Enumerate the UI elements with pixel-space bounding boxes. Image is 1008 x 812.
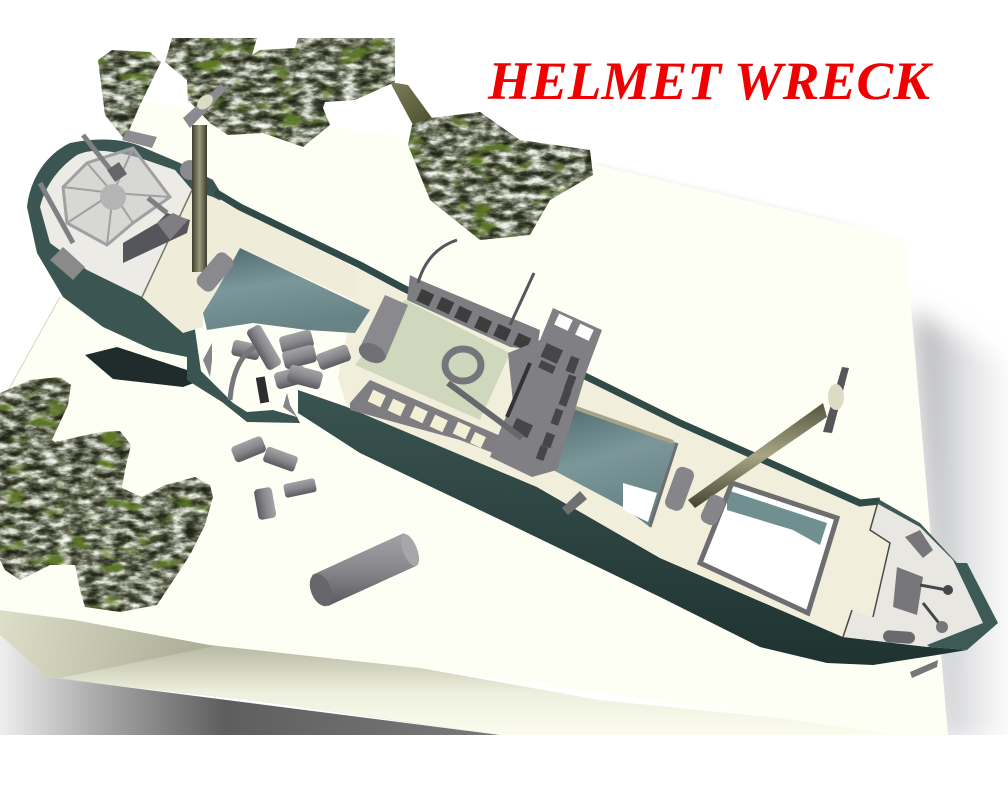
wreck: forward cargo hold — [700, 483, 837, 613]
icon: straight pipe — [510, 273, 534, 325]
wreck: deck house frame — [490, 308, 602, 477]
rock: top centre — [160, 36, 398, 150]
icon: curved pipe — [418, 240, 457, 283]
rock: top right — [390, 82, 432, 127]
slab: sea floor — [0, 100, 948, 735]
icon: midship gun — [562, 491, 587, 515]
wreck: scattered barrels on deck — [203, 324, 352, 417]
slab shadow: right and top — [592, 164, 1008, 740]
wreck: stern machinery — [40, 130, 200, 280]
icon: bollards lower — [883, 630, 915, 644]
icon: ring on deck — [445, 349, 481, 381]
wreck: bow deck — [843, 500, 998, 678]
wreck: main hull — [215, 192, 967, 665]
icon: forward winches — [663, 465, 696, 513]
mast: forward — [562, 367, 849, 527]
wreck: stern section — [27, 140, 360, 384]
wreck: midship cargo hold — [553, 405, 677, 527]
rock: top far left — [98, 50, 161, 138]
wreck: torn hull fragment — [85, 347, 202, 387]
wreck: superstructure — [350, 240, 602, 477]
large cylinder on sea floor — [305, 532, 423, 610]
barrels: on sea floor — [230, 435, 317, 520]
rocks — [0, 36, 595, 615]
shipwreck — [27, 84, 998, 678]
wreck: broken keel strip — [187, 358, 300, 423]
title: HELMET WRECK — [487, 51, 934, 111]
slab: front face — [0, 610, 948, 735]
mast: stern — [183, 84, 236, 295]
icon: bow winch — [893, 567, 923, 615]
rock: bottom left — [0, 375, 215, 615]
slab: drop shadow beneath — [0, 635, 500, 735]
icon: large cylinder on deck — [360, 295, 408, 360]
icon: bollards upper — [905, 530, 933, 558]
wreck: rear cargo hold — [203, 248, 370, 333]
icon: anchor at bow — [910, 660, 938, 678]
